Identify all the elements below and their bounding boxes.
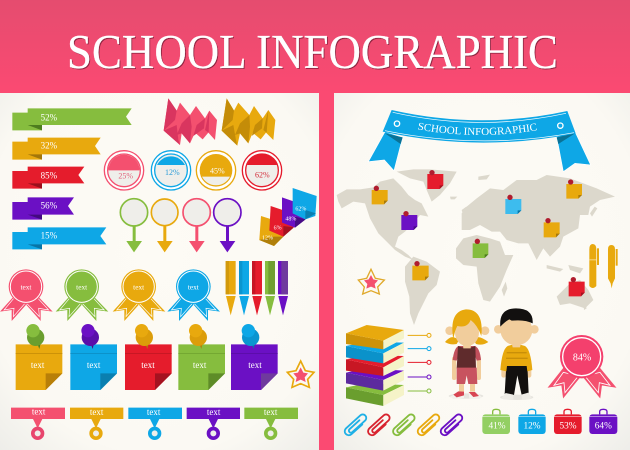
map note green	[473, 239, 488, 258]
bag green 41%: 41%	[488, 422, 506, 432]
book purple	[346, 368, 404, 391]
clip green	[391, 413, 417, 437]
pin green	[120, 199, 148, 252]
header banner	[0, 0, 630, 92]
step 48%: 48%	[285, 216, 296, 222]
stack of books	[346, 325, 431, 406]
note yellow: text	[31, 360, 45, 370]
ribbon 15%: 15%	[41, 231, 58, 241]
map note red	[569, 277, 585, 296]
bag red 53%: 53%	[559, 422, 577, 432]
boy	[494, 308, 539, 400]
large rosette 84%: 84%	[573, 352, 591, 363]
star left panel	[287, 361, 314, 387]
ribbon 85%: 85%	[41, 170, 58, 180]
tag pink	[11, 406, 65, 438]
pencil purple	[278, 261, 288, 315]
pens	[589, 244, 618, 288]
clip purple	[439, 413, 464, 437]
pin purple	[214, 199, 241, 252]
girl	[445, 309, 489, 399]
note red	[125, 324, 172, 390]
pencil yellow	[226, 261, 236, 315]
map note yellow	[412, 261, 429, 280]
book blue	[346, 342, 404, 363]
bag purple 64%: 64%	[595, 422, 612, 432]
circle 25%	[104, 151, 144, 190]
badge blue	[167, 269, 220, 321]
tag pink: text	[32, 406, 46, 416]
bag blue 12%: 12%	[523, 422, 541, 432]
percentage circles	[104, 151, 282, 190]
clip red	[366, 413, 392, 437]
sticky notes with push pins	[16, 324, 278, 390]
map sticky notes	[372, 170, 585, 296]
badge green	[56, 269, 108, 321]
paper clips	[343, 413, 464, 437]
pen wide	[589, 244, 599, 288]
note purple: text	[248, 360, 262, 370]
curved ribbon banner: SCHOOL INFOGRAPHIC	[418, 122, 537, 135]
map note yellow	[566, 179, 582, 199]
ribbon 52%: 52%	[41, 112, 58, 122]
step 6%: 6%	[274, 226, 282, 232]
note yellow	[16, 324, 62, 390]
ribbons with percentages	[12, 108, 132, 249]
note blue: text	[87, 360, 101, 370]
percentage bags	[482, 409, 617, 434]
tag green	[244, 407, 298, 438]
origami folds	[164, 98, 275, 146]
ribbon 32%: 32%	[41, 141, 58, 151]
tag purple: text	[207, 407, 221, 417]
step 12%: 12%	[262, 236, 273, 242]
tag purple	[187, 407, 240, 438]
panel: left	[0, 93, 319, 450]
step 62%: 62%	[295, 206, 306, 212]
circle 45%: 45%	[210, 166, 225, 175]
circle 12%	[151, 151, 191, 190]
tag green: text	[264, 407, 278, 417]
ribbon 56%: 56%	[41, 200, 58, 210]
ribbon 32%	[12, 138, 101, 160]
badge yellow: text	[133, 282, 144, 291]
note blue	[70, 324, 117, 390]
large rosette 84%	[548, 335, 616, 398]
book red	[346, 355, 404, 376]
badge green: text	[76, 282, 87, 291]
star right panel	[358, 269, 384, 294]
circle 62%: 62%	[255, 171, 270, 180]
map note purple	[401, 211, 417, 230]
clip yellow	[416, 413, 441, 437]
book yellow	[346, 325, 404, 349]
curved ribbon banner	[368, 110, 591, 172]
tag labels	[11, 406, 298, 438]
map note yellow	[544, 218, 560, 237]
ribbon 15%	[12, 227, 106, 249]
clip blue	[343, 413, 368, 437]
note purple	[231, 324, 278, 390]
badge yellow	[113, 269, 165, 321]
pin pink	[183, 199, 210, 252]
circle 62%	[242, 151, 282, 190]
book connector lines	[408, 333, 431, 393]
map note blue	[505, 195, 521, 214]
badge blue: text	[188, 282, 199, 291]
pencil red	[252, 261, 262, 315]
map note orange	[372, 186, 388, 204]
note green	[178, 324, 225, 390]
rosette badges	[0, 269, 220, 321]
tag yellow: text	[90, 407, 104, 417]
book green	[346, 383, 404, 406]
origami yellow	[222, 98, 275, 146]
title: SCHOOL INFOGRAPHIC	[67, 24, 558, 79]
origami pink	[164, 98, 217, 145]
ribbon 56%	[12, 197, 74, 220]
circle 12%: 12%	[165, 168, 180, 177]
circle 25%: 25%	[118, 171, 133, 180]
world map	[337, 169, 615, 325]
map note red	[427, 170, 443, 189]
ribbon 85%	[12, 167, 84, 189]
note green: text	[193, 360, 207, 370]
pencil blue	[239, 261, 249, 315]
tag blue: text	[147, 407, 161, 417]
ribbon 52%	[12, 108, 132, 130]
note red: text	[141, 360, 155, 370]
map pin arrows	[120, 199, 241, 252]
panel: right	[334, 93, 630, 450]
title: SCHOOL INFOGRAPHIC	[68, 25, 559, 80]
pen narrow	[608, 245, 618, 288]
tag yellow	[70, 407, 123, 438]
tag blue	[128, 407, 182, 438]
3D percentage steps	[259, 188, 317, 246]
pencils	[226, 261, 288, 315]
badge pink: text	[20, 282, 31, 291]
pencil green	[265, 261, 275, 315]
pin yellow	[151, 199, 178, 252]
circle 45%	[196, 151, 236, 190]
badge pink	[0, 269, 53, 321]
